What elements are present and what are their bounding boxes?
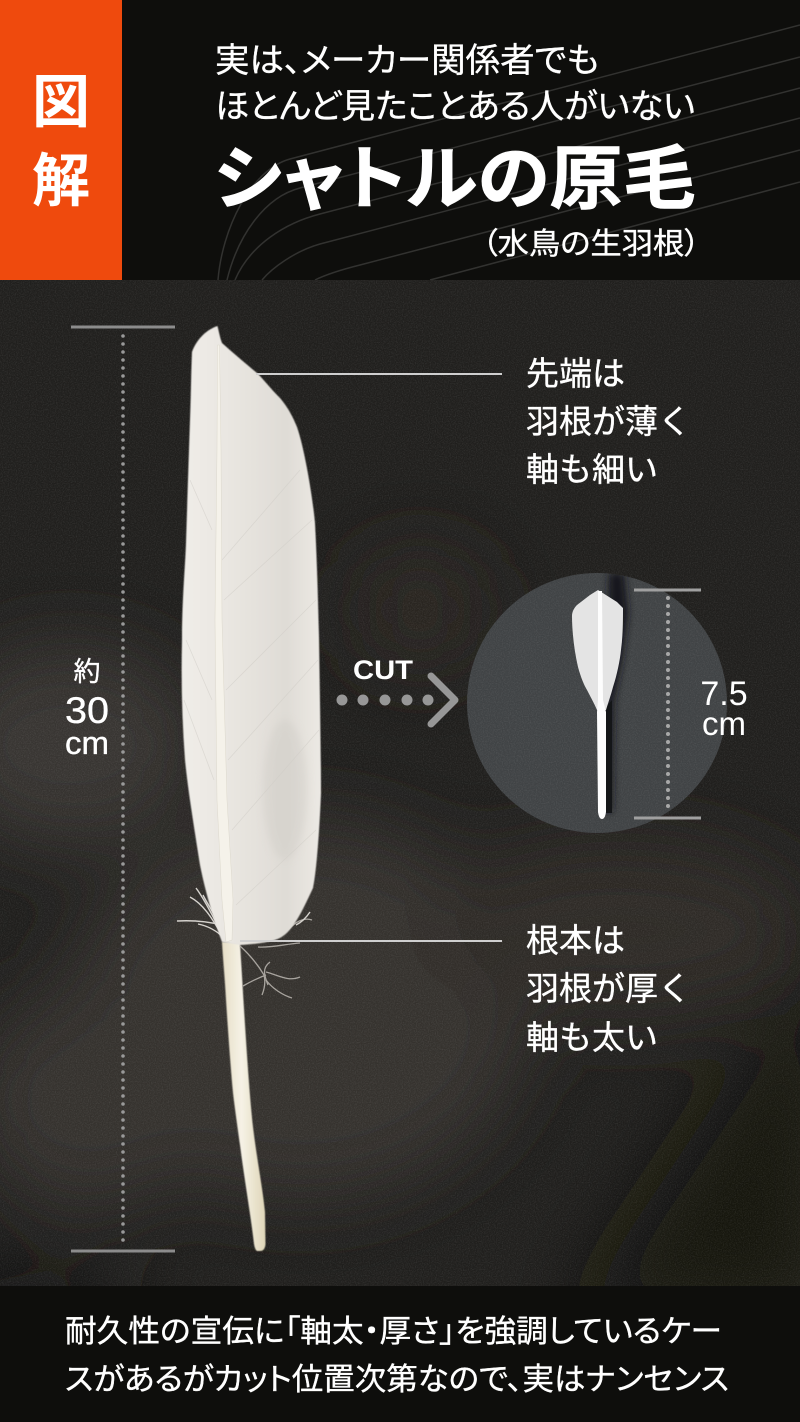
- header band: [0, 0, 800, 280]
- cut feather vane: [572, 590, 623, 710]
- label: tip: 軸も細い: [526, 451, 658, 488]
- leader line: base: [240, 940, 502, 942]
- feather vane: [182, 326, 321, 945]
- ruler label: about 30 cm: 約: [74, 657, 100, 687]
- ruler label: 7.5 cm: cm: [702, 705, 746, 742]
- label: base: 軸も太い: [526, 1019, 658, 1056]
- label: base: 根本は: [526, 922, 625, 959]
- footer text: 耐久性の宣伝に「軸太・厚さ」を強調しているケー: [65, 1314, 722, 1349]
- footer text: [65, 1314, 729, 1397]
- CUT label: CUT: [353, 655, 414, 685]
- main title: シャトルの原毛: [214, 140, 696, 218]
- ruler label: about 30 cm: cm: [65, 725, 109, 761]
- subtitle lines: 実は、メーカー関係者でも: [215, 42, 599, 80]
- label: tip: 先端は: [526, 355, 625, 392]
- subtitle lines: [215, 42, 695, 126]
- badge: 図解: 解: [32, 149, 90, 214]
- photo background: [0, 280, 800, 1350]
- feather quill: [222, 942, 266, 1251]
- badge: 図解: [0, 0, 122, 280]
- circle inset: cut feather: [467, 572, 727, 833]
- subtitle lines: ほとんど見たことある人がいない: [215, 88, 695, 126]
- footer band: [0, 1286, 800, 1422]
- ruler label: about 30 cm: [65, 657, 109, 761]
- cut feather stem: [597, 591, 606, 819]
- label: base: 羽根が厚く: [526, 970, 691, 1007]
- ruler label: 7.5 cm: [700, 675, 748, 742]
- title note: （水鳥の生羽根）: [482, 228, 700, 261]
- height ruler: about 30 cm: [71, 327, 175, 1251]
- arrow: cut: [336, 676, 455, 724]
- small ruler: 7.5 cm: [634, 590, 701, 818]
- ruler label: 7.5 cm: 7.5: [700, 675, 748, 713]
- leader line: tip: [256, 373, 502, 375]
- label: base: [526, 922, 691, 1056]
- feather photo: [177, 326, 321, 1251]
- feather shaft: [215, 345, 233, 942]
- badge: 図解: 図: [32, 70, 90, 135]
- label: tip: 羽根が薄く: [526, 403, 691, 440]
- footer text: スがあるがカット位置次第なので、実はナンセンス: [65, 1362, 729, 1397]
- ruler label: about 30 cm: 30: [65, 690, 109, 731]
- label: tip: [526, 355, 691, 488]
